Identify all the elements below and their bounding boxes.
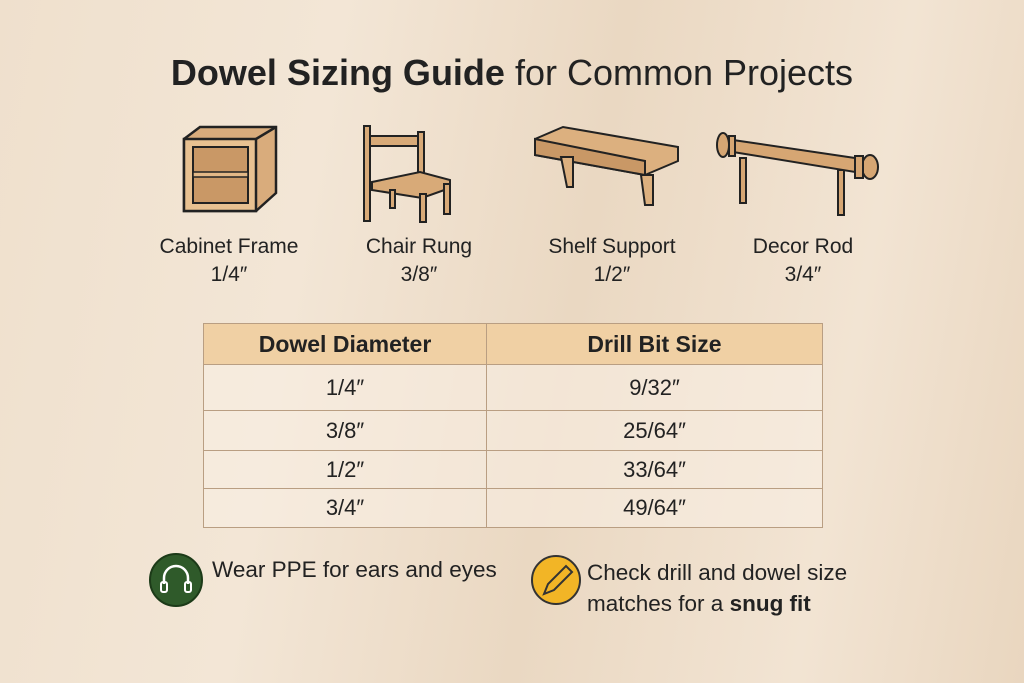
label: chair rung: 3/8″ [401, 263, 437, 286]
table: 3/8″ [326, 418, 364, 442]
icon: cabinet [182, 126, 278, 212]
label: decor rod: Decor Rod [753, 235, 853, 258]
tip: snug fit [531, 555, 847, 616]
label: shelf support: Shelf Support [548, 235, 676, 258]
table: Drill Bit Size [587, 330, 722, 356]
label: cabinet frame: 1/4″ [211, 263, 247, 286]
label: cabinet frame [160, 235, 298, 286]
label: chair rung: Chair Rung [366, 235, 472, 258]
icon: shelf [534, 126, 679, 206]
label: shelf support [548, 235, 676, 286]
icon: headphones [149, 553, 203, 607]
tip: PPE [149, 553, 497, 607]
text: Check drill and dowel size [587, 560, 847, 585]
icon: decor rod [716, 132, 879, 216]
text [587, 560, 847, 616]
text: matches for a snug fit [587, 591, 811, 616]
label: decor rod: 3/4″ [785, 263, 821, 286]
title: Dowel Sizing Guide for Common Projects [171, 52, 853, 93]
label: decor rod [753, 235, 853, 286]
table: Dowel Diameter [259, 330, 431, 356]
table: 1/2″ [326, 456, 364, 482]
label: chair rung [366, 235, 472, 286]
table: 49/64″ [623, 495, 686, 520]
table: 9/32″ [629, 374, 680, 400]
table: 1/4″ [326, 374, 364, 400]
label: shelf support: 1/2″ [594, 263, 630, 286]
table: 3/4″ [326, 495, 364, 520]
icon: pencil [531, 555, 581, 605]
icon: chair [363, 125, 451, 223]
table [203, 323, 823, 528]
text: Wear PPE for ears and eyes [212, 557, 497, 582]
table: 33/64″ [623, 456, 686, 482]
table: 25/64″ [623, 418, 686, 442]
label: cabinet frame: Cabinet Frame [160, 235, 298, 258]
